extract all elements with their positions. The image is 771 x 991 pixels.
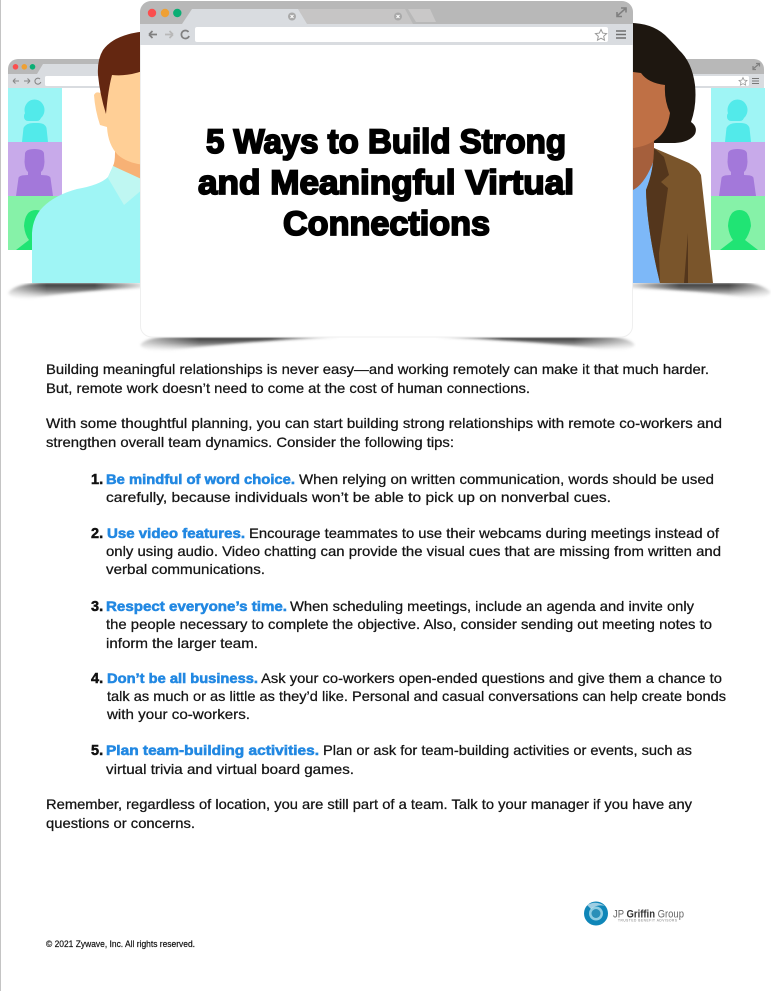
small third tab (408, 9, 436, 22)
woman illustration (625, 23, 713, 283)
address bar (195, 27, 608, 42)
tip 1 (91, 471, 714, 505)
tip 1: 1. (91, 472, 103, 488)
tip 5: Plan or ask for team-building activities or events, such as (323, 743, 692, 758)
icon: expand (617, 8, 626, 16)
icon: expand (753, 64, 760, 70)
icon: star (595, 30, 607, 40)
tip 2: Use video features. (107, 525, 245, 541)
title bar (600, 59, 764, 74)
tip 5: Plan team-building activities. (106, 742, 319, 758)
collar (108, 166, 150, 205)
video tile: green (711, 196, 765, 250)
closing paragraph: Remember, regardless of location, you are still part of a team. Talk to your manager if you have any (46, 797, 692, 812)
logo: JP Griffin Group (584, 902, 684, 926)
tip 4: with your co-workers. (106, 707, 250, 722)
intro paragraph 1: But, remote work doesn’t need to come at the cost of human connections. (46, 381, 530, 396)
shirt (625, 160, 662, 283)
lapel (646, 148, 669, 283)
tip 5: 5. (91, 743, 103, 759)
left back browser window (8, 59, 140, 298)
face (94, 70, 150, 165)
hair (98, 31, 150, 114)
window dots (148, 9, 182, 17)
tip 5: virtual trivia and virtual board games. (106, 762, 354, 777)
inactive tab (298, 9, 413, 24)
shadow: main window left (140, 338, 330, 350)
closing paragraph (46, 797, 692, 831)
tip 2: verbal communications. (106, 562, 265, 577)
neck (113, 140, 150, 185)
jacket (646, 148, 713, 283)
tip 1: carefully, because individuals won’t be able to pick up on nonverbal cues. (106, 490, 611, 505)
icon: menu (616, 31, 626, 38)
shadow: main window right (445, 338, 634, 350)
man illustration (32, 31, 150, 283)
icon: logo swirl (584, 902, 608, 926)
nav arrows (13, 78, 41, 84)
tip 2: only using audio. Video chatting can provide the visual cues that are missing from written and (106, 544, 721, 559)
shadow: left window (8, 283, 142, 299)
tip 3: inform the larger team. (106, 636, 258, 651)
intro paragraph 1: Building meaningful relationships is never easy—and working remotely can make it that much harder. (46, 362, 709, 377)
silhouette: green tile (16, 210, 55, 250)
toolbar (600, 74, 764, 88)
tip 2 (91, 525, 721, 577)
tip 3 (91, 598, 712, 651)
video tile: green (8, 196, 62, 250)
main browser window (140, 1, 635, 351)
window frame (8, 59, 200, 283)
tip 4: Ask your co-workers open-ended questions and give them a chance to (261, 671, 722, 686)
title: and Meaningful Virtual (198, 164, 574, 202)
closing paragraph: questions or concerns. (46, 816, 195, 831)
intro paragraph 2: strengthen overall team dynamics. Consider the following tips: (46, 435, 454, 450)
shadow: right window (630, 283, 771, 298)
tip 1: When relying on written communication, words should be used (299, 472, 714, 487)
copyright footer: © 2021 Zywave, Inc. All rights reserved. (46, 939, 195, 950)
tip 3: 3. (91, 599, 103, 615)
tab close icons (288, 12, 402, 20)
jacket slit (684, 233, 688, 283)
tip 2: 2. (91, 526, 103, 542)
title bar (8, 59, 200, 74)
window body (140, 2, 632, 337)
tip 4 (91, 670, 726, 722)
tip 2: Encourage teammates to use their webcams during meetings instead of (249, 526, 719, 541)
nav icons (149, 31, 189, 39)
logo tagline: TRUSTED BENEFIT ADVISORS (618, 918, 677, 922)
intro paragraph 2 (46, 416, 722, 450)
face (625, 72, 670, 148)
tip 1: Be mindful of word choice. (106, 471, 295, 487)
tip 3: the people necessary to complete the objective. Also, consider sending out meeting notes to (106, 617, 712, 632)
window dots (13, 64, 35, 70)
tip 4: talk as much or as little as they’d like. Personal and casual conversations can help create bonds (107, 689, 726, 704)
active tab (182, 9, 307, 24)
tip 5 (91, 742, 692, 777)
neck (625, 140, 654, 195)
intro paragraph 2: With some thoughtful planning, you can start building strong relationships with remote co-workers and (46, 416, 722, 431)
right back browser window (633, 59, 770, 298)
hair (625, 23, 696, 143)
title (198, 123, 574, 243)
tip 3: Respect everyone’s time. (106, 598, 287, 614)
window frame (600, 59, 764, 283)
video tile: purple (711, 142, 765, 196)
video tile: teal (711, 88, 765, 142)
toolbar (140, 24, 633, 45)
title bar (140, 1, 633, 24)
toolbar (8, 74, 200, 88)
title: 5 Ways to Build Strong (206, 123, 566, 161)
tip 4: Don’t be all business. (107, 670, 258, 686)
video tile: purple (8, 142, 62, 196)
shirt (32, 166, 150, 283)
tip 4: 4. (91, 671, 103, 687)
title: Connections (283, 205, 490, 243)
logo wordmark: JP Griffin Group (613, 908, 684, 920)
tip 3: When scheduling meetings, include an agenda and invite only (290, 599, 694, 614)
tab (37, 64, 200, 74)
video tile: teal (8, 88, 62, 142)
intro paragraph 1 (46, 362, 709, 396)
icon: star (739, 78, 747, 85)
icon: menu (752, 78, 759, 84)
